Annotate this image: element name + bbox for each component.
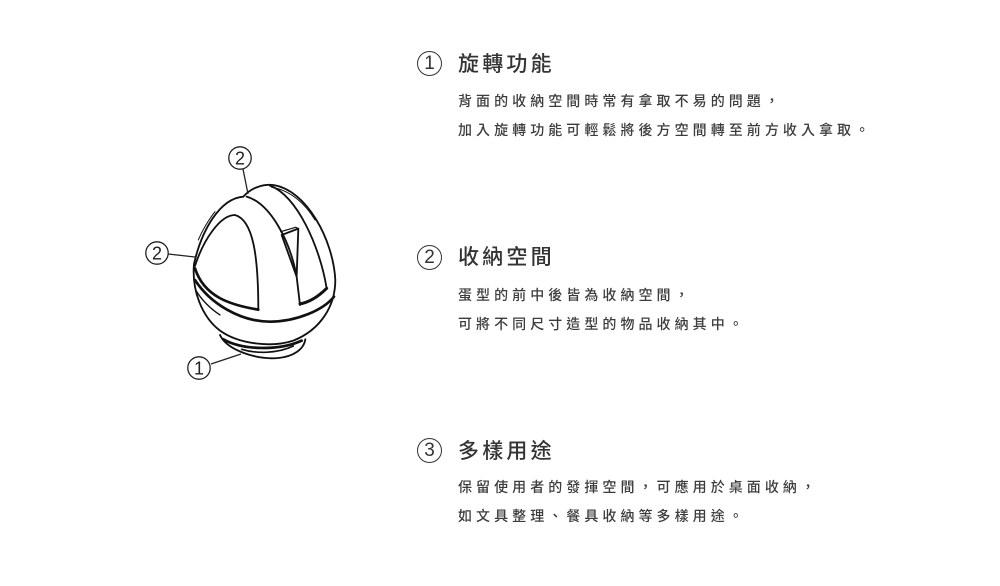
number 2 — [417, 245, 442, 270]
body 2: 蛋型的前中後皆為收納空間， — [458, 287, 693, 303]
egg body outline — [194, 185, 335, 344]
callout 2 top: 2 — [235, 148, 245, 168]
heading 3: 多樣用途 — [458, 440, 555, 463]
number 2: 2 — [424, 247, 435, 268]
body 2 — [458, 287, 747, 332]
storage slot panel — [247, 186, 327, 305]
egg base — [220, 335, 305, 358]
body 3: 保留使用者的發揮空間，可應用於桌面收納， — [458, 479, 819, 495]
body 2: 可將不同尺寸造型的物品收納其中。 — [458, 316, 747, 332]
number 1 — [417, 51, 442, 76]
heading 1: 旋轉功能 — [458, 53, 555, 76]
number 3 — [417, 438, 442, 463]
callout 1 — [188, 357, 210, 379]
body 3 — [458, 479, 819, 524]
front window — [195, 215, 258, 310]
callout 1: 1 — [194, 358, 204, 378]
body 1: 背面的收納空間時常有拿取不易的問題， — [458, 93, 783, 109]
body 1: 加入旋轉功能可輕鬆將後方空間轉至前方收入拿取。 — [458, 122, 873, 138]
body 1 — [458, 93, 873, 138]
number 3: 3 — [424, 440, 435, 461]
heading 2: 收納空間 — [458, 246, 555, 269]
callout 2 left — [146, 242, 168, 264]
callout leader lines — [168, 169, 248, 364]
body 3: 如文具整理、餐具收納等多樣用途。 — [458, 508, 747, 524]
rotation band — [195, 212, 334, 322]
number 1: 1 — [424, 53, 435, 74]
callout 2 top — [229, 147, 251, 169]
callout 2 left: 2 — [152, 244, 162, 264]
